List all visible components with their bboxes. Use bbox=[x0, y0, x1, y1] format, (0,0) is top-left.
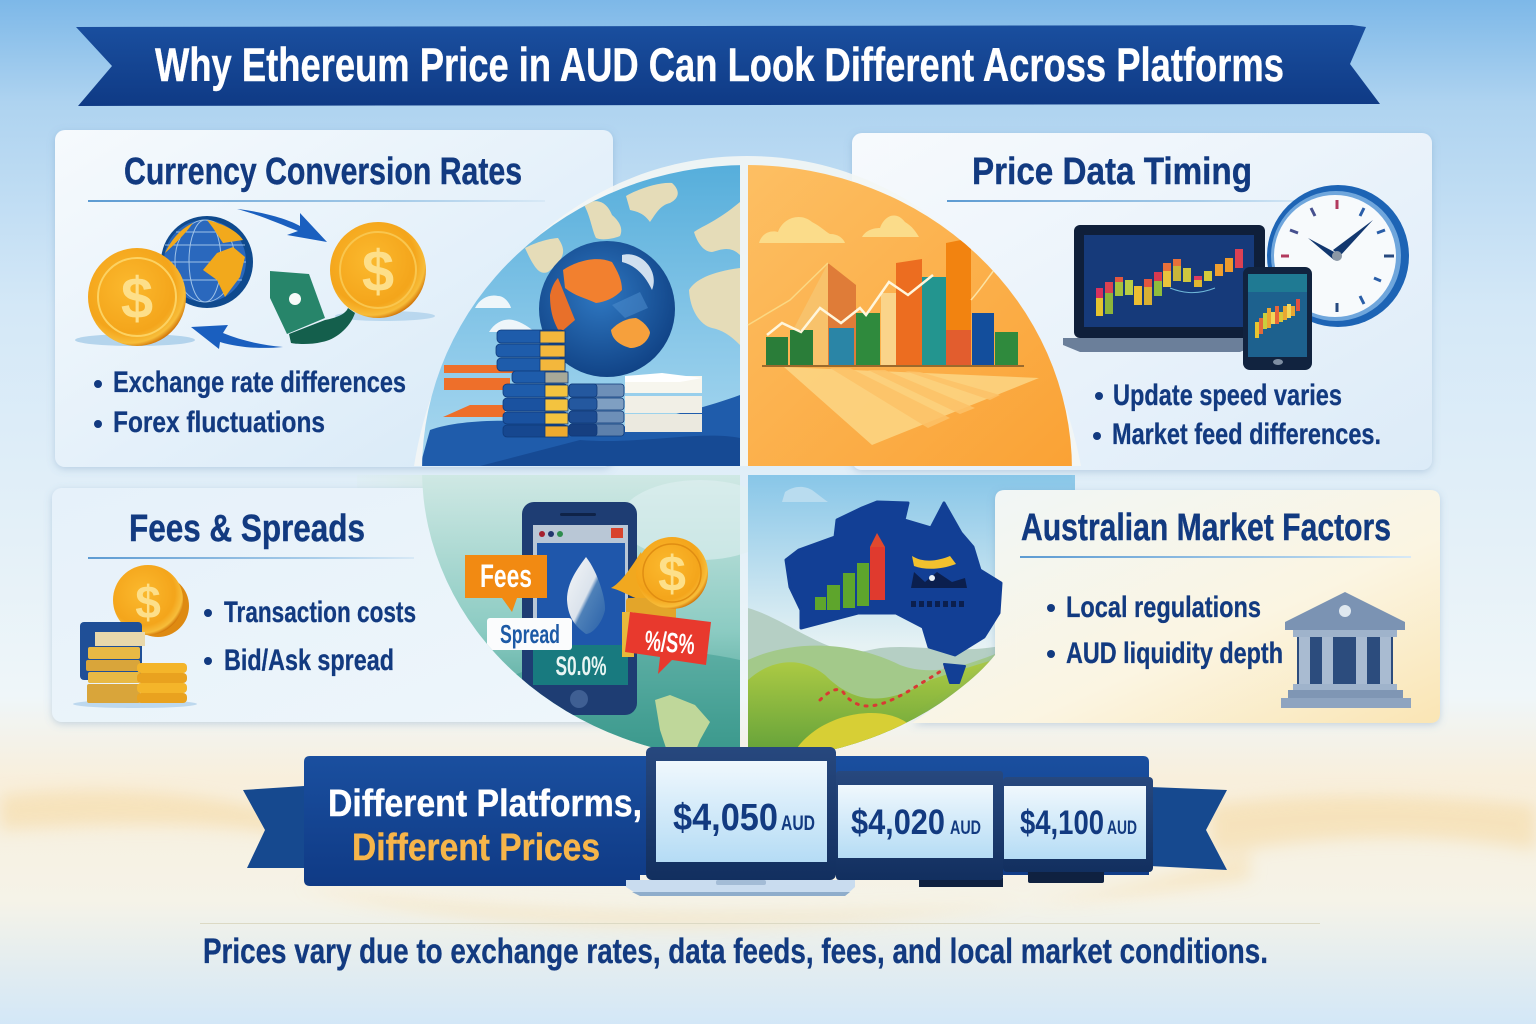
ribbon shape bbox=[76, 25, 1380, 106]
icon: coins, card and cash bbox=[73, 565, 197, 708]
banner main body bbox=[304, 756, 1149, 886]
illustration: globe and coin stacks quadrant bbox=[420, 165, 740, 466]
bullet list: Market feed differences. bbox=[1112, 418, 1381, 451]
icon: right dollar coin: $ bbox=[362, 239, 394, 304]
phone screen amount: S0.0% bbox=[556, 651, 606, 681]
panel background bbox=[852, 133, 1432, 470]
grey blue stack bbox=[569, 384, 624, 436]
blue and gold coin stack bbox=[496, 330, 568, 437]
bullet list: Bid/Ask spread bbox=[224, 644, 394, 677]
bullet list: Exchange rate differences bbox=[113, 366, 406, 399]
clouds bbox=[475, 296, 535, 332]
banner text bbox=[328, 783, 642, 869]
icon: phone bbox=[522, 502, 637, 715]
device: laptop 4,050 AUD: AUD bbox=[781, 812, 815, 835]
device: monitor 4,020 AUD bbox=[836, 771, 1003, 887]
icon: clock bbox=[1267, 185, 1409, 327]
heading: Australian Market Factors bbox=[1021, 507, 1391, 549]
icon: globe bbox=[161, 216, 253, 308]
banner text: Different Platforms, bbox=[328, 783, 642, 825]
icon: gold coin and stack bbox=[611, 537, 708, 657]
globe bbox=[539, 241, 675, 377]
illustration: fees and phone quadrant bbox=[422, 475, 740, 748]
bullet list: Update speed varies bbox=[1113, 379, 1342, 412]
illustration: orange bar chart quadrant bbox=[748, 165, 1073, 466]
bottom caption: Prices vary due to exchange rates, data feeds, fees, and local market conditions. bbox=[203, 932, 1268, 971]
bullet list bbox=[204, 596, 416, 677]
heading: Price Data Timing bbox=[972, 151, 1252, 193]
bullet list: AUD liquidity depth bbox=[1066, 637, 1283, 670]
heading: Currency Conversion Rates bbox=[124, 151, 522, 193]
title ribbon bbox=[76, 25, 1380, 106]
heading: Fees & Spreads bbox=[129, 508, 365, 550]
center circle pale rim bbox=[414, 156, 1081, 466]
fees speech bubble bbox=[465, 555, 547, 612]
device: monitor 4,020 AUD: $4,020 bbox=[851, 803, 945, 842]
arrow: bottom bbox=[191, 325, 283, 349]
percent speech bubble bbox=[625, 612, 711, 674]
icon: left dollar coin bbox=[75, 248, 195, 346]
spread tag: Spread bbox=[500, 619, 560, 649]
panel: australian market factors bbox=[912, 490, 1440, 723]
bullet list bbox=[1047, 591, 1283, 670]
water bbox=[420, 395, 740, 466]
caption rule bbox=[200, 923, 1320, 924]
device: tablet 4,100 AUD: $4,100 bbox=[1020, 804, 1104, 842]
device: monitor 4,020 AUD: AUD bbox=[950, 818, 981, 839]
fees speech bubble: Fees bbox=[480, 558, 532, 594]
panel: fees and spreads content bbox=[73, 508, 416, 708]
device: tablet 4,100 AUD bbox=[1003, 777, 1153, 883]
arrow: top bbox=[237, 209, 327, 242]
panel: fees and spreads background bbox=[52, 475, 740, 722]
percent speech bubble: %/S% bbox=[644, 625, 696, 660]
banner text: Different Prices bbox=[352, 827, 600, 869]
icon: right dollar coin bbox=[330, 222, 435, 321]
map bar chart bbox=[815, 533, 885, 610]
bullet list bbox=[1093, 379, 1381, 451]
panel background bbox=[912, 490, 1440, 723]
icon: tablet with chart bbox=[1243, 267, 1312, 370]
land bbox=[655, 695, 710, 747]
icon: green banknote bbox=[270, 271, 355, 344]
hills bbox=[748, 608, 995, 721]
device: tablet 4,100 AUD: AUD bbox=[1107, 818, 1137, 839]
device: laptop 4,050 AUD: $4,050 bbox=[673, 797, 778, 839]
map of australia bbox=[786, 502, 1001, 683]
orange stripes bbox=[443, 365, 514, 417]
chart floor bbox=[784, 367, 1039, 445]
clouds bbox=[759, 215, 919, 243]
spread tag bbox=[487, 618, 572, 650]
background sand swooshes bbox=[0, 790, 1536, 926]
bullet list bbox=[94, 366, 406, 439]
map emblem bbox=[911, 556, 967, 604]
icon: laptop with candlestick chart bbox=[1063, 225, 1265, 352]
illustration: australia landscape quadrant bbox=[748, 486, 995, 750]
bullet list: Local regulations bbox=[1066, 591, 1261, 624]
icon: left dollar coin: $ bbox=[121, 266, 153, 331]
world map land bbox=[525, 183, 740, 345]
dotted route bbox=[820, 666, 948, 706]
bottom banner bbox=[243, 747, 1227, 896]
bars bbox=[762, 238, 1024, 367]
white sheet stacks bbox=[625, 373, 702, 432]
icon: coins, card and cash: $ bbox=[135, 576, 161, 628]
banner right tail bbox=[1150, 787, 1227, 870]
panel: australian market factors sky backing bbox=[748, 475, 1075, 505]
banner left tail bbox=[243, 786, 304, 868]
panel: currency conversion rates bbox=[55, 130, 613, 467]
icon: gold coin and stack: $ bbox=[658, 546, 686, 602]
icon: bank building bbox=[1281, 592, 1411, 708]
bullet list: Forex fluctuations bbox=[113, 406, 325, 439]
device: laptop 4,050 AUD bbox=[626, 747, 855, 896]
bullet list: Transaction costs bbox=[224, 596, 416, 629]
panel background bbox=[55, 130, 613, 467]
ethereum drop bbox=[567, 557, 605, 634]
panel: price data timing bbox=[852, 133, 1432, 470]
trend line bbox=[767, 275, 933, 335]
